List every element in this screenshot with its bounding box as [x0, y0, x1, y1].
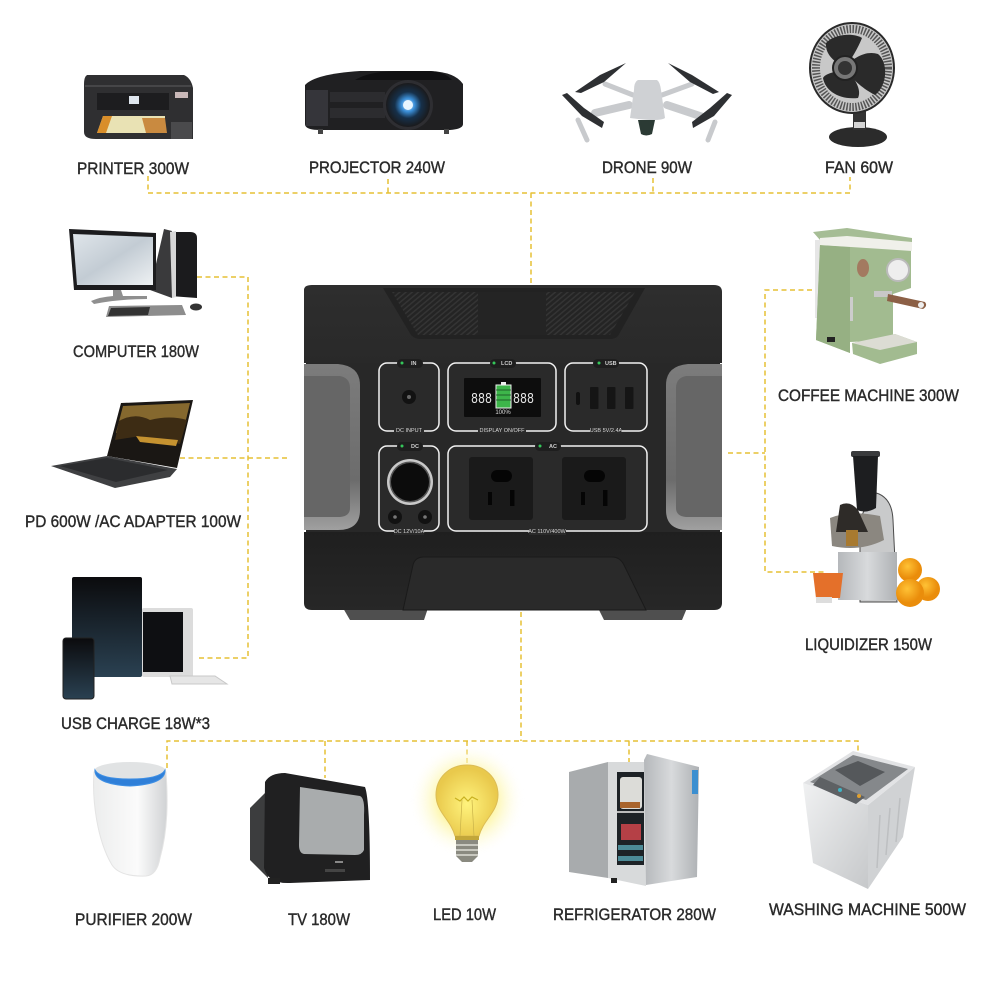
device: drone — [562, 63, 732, 177]
icon: purifier — [94, 762, 167, 876]
panel: ac outlets — [448, 442, 647, 535]
device: laptop — [25, 400, 241, 531]
icon: computer — [69, 229, 202, 317]
label: liquidizer: LIQUIDIZER 150W — [805, 636, 932, 654]
icon: fan — [810, 23, 894, 147]
panel: dc input — [379, 359, 439, 434]
panel: lcd display: 888 — [513, 391, 534, 408]
label: refrigerator: REFRIGERATOR 280W — [553, 906, 716, 924]
device: led bulb — [409, 742, 525, 924]
device: computer — [69, 229, 202, 361]
icon: light bulb — [409, 742, 525, 862]
panel: dc input: IN — [411, 361, 417, 367]
label: computer: COMPUTER 180W — [73, 343, 199, 361]
icon: drone — [562, 63, 732, 140]
label: laptop: PD 600W /AC ADAPTER 100W — [25, 513, 241, 531]
panel: ac outlets: AC — [549, 444, 557, 450]
bottom emboss — [403, 557, 646, 610]
label: led: LED 10W — [433, 906, 496, 924]
panel: dc output: DC — [411, 444, 419, 450]
label: washing machine: WASHING MACHINE 500W — [769, 901, 966, 919]
outlet: right — [562, 457, 626, 520]
device: refrigerator — [553, 754, 716, 924]
panel: usb — [565, 359, 647, 434]
panel: lcd display — [448, 359, 556, 434]
icon: washing machine — [803, 751, 915, 889]
icon: refrigerator — [569, 754, 699, 886]
device: coffee machine — [778, 228, 959, 405]
device: liquidizer — [805, 451, 940, 654]
body: centre block — [306, 350, 720, 540]
device: purifier — [75, 762, 192, 929]
side handle: left — [304, 364, 360, 530]
panel: usb: USB 5V/2.4A — [590, 428, 623, 434]
label: coffee machine: COFFEE MACHINE 300W — [778, 387, 959, 405]
panel: lcd display: 100% — [495, 410, 511, 416]
icon: projector — [305, 71, 463, 134]
label: projector: PROJECTOR 240W — [309, 159, 445, 177]
top vent — [383, 288, 645, 339]
label: drone: DRONE 90W — [602, 159, 692, 177]
panel: dc input: DC INPUT — [396, 428, 423, 434]
device: washing machine — [769, 751, 966, 919]
side handle: right — [666, 364, 722, 530]
device: tv — [250, 773, 370, 929]
device: usb devices — [61, 577, 227, 733]
label: usb charge: USB CHARGE 18W*3 — [61, 715, 210, 733]
feet — [343, 608, 687, 620]
icon: tv — [250, 773, 370, 884]
label: printer: PRINTER 300W — [77, 160, 189, 178]
panel: lcd display: 888 — [471, 391, 492, 408]
panel: lcd display: LCD — [501, 361, 512, 367]
icon: laptop — [51, 400, 193, 488]
device: fan — [810, 23, 894, 177]
panel: usb: USB — [605, 361, 617, 367]
panel: lcd display: DISPLAY ON/OFF — [479, 428, 525, 434]
icon: coffee machine — [813, 228, 926, 364]
icon: printer — [84, 75, 193, 139]
connector lines — [148, 176, 858, 778]
icon: juicer — [813, 451, 940, 607]
label: fan: FAN 60W — [825, 159, 893, 177]
panel: ac outlets: AC 110V/400W — [528, 529, 567, 535]
panel: dc output: DC 12V/10A — [394, 529, 425, 535]
top body — [304, 285, 722, 363]
device: printer — [77, 75, 193, 178]
label: tv: TV 180W — [288, 911, 350, 929]
device: projector — [305, 71, 463, 177]
bottom body — [304, 532, 722, 610]
label: purifier: PURIFIER 200W — [75, 911, 192, 929]
power station — [304, 285, 722, 620]
outlet: left — [469, 457, 533, 520]
icon: tablets and phone — [63, 577, 227, 699]
panel: dc output — [379, 442, 439, 535]
